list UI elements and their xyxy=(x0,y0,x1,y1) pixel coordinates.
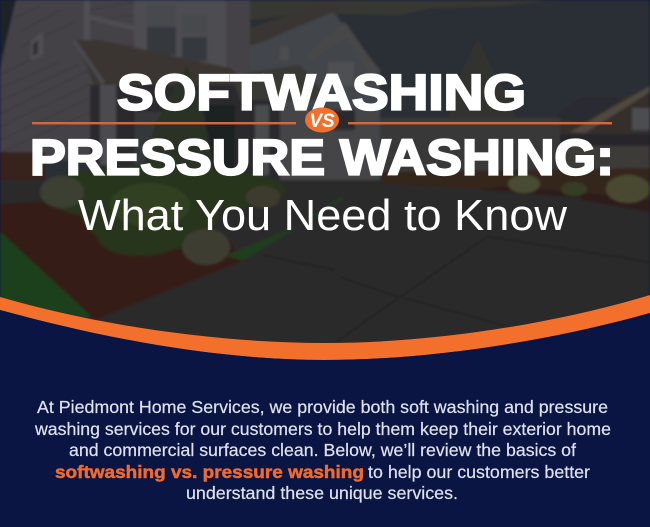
porch roof xyxy=(76,40,270,100)
lawn right xyxy=(225,197,400,263)
lawn left xyxy=(0,232,90,325)
sky xyxy=(0,0,650,200)
main house siding wall xyxy=(0,0,250,160)
orange curved band xyxy=(0,295,650,360)
intro paragraph: understand these unique services. xyxy=(186,483,458,503)
evergreen shrub xyxy=(40,164,285,256)
title line two: PRESSURE WASHING: xyxy=(30,130,614,186)
garage and porch lower xyxy=(90,85,280,185)
mulch bed xyxy=(0,200,240,320)
second house gable xyxy=(230,2,380,185)
centre background houses xyxy=(380,118,560,180)
intro paragraph: and commercial surfaces clean. Below, we’ll review the basics of xyxy=(69,440,576,460)
intro paragraph: At Piedmont Home Services, we provide both soft washing and pressure xyxy=(37,397,608,417)
title divider line left xyxy=(32,122,296,124)
small side window xyxy=(31,32,43,60)
distant tree xyxy=(440,38,540,150)
intro paragraph: washing services for our customers to help them keep their exterior home xyxy=(34,419,611,439)
vs badge: VS xyxy=(309,111,335,132)
subtitle: What You Need to Know xyxy=(78,191,567,240)
right neighbouring house xyxy=(550,86,650,172)
small pine in front of porch xyxy=(140,65,215,175)
intro paragraph xyxy=(34,397,611,503)
ground base xyxy=(0,180,650,350)
driveway xyxy=(95,186,650,330)
navy lower panel xyxy=(0,310,650,527)
intro paragraph: softwashing vs. pressure washing xyxy=(55,462,364,482)
ornamental grass tufts xyxy=(182,229,230,265)
right shrubs xyxy=(508,175,540,193)
title divider line right xyxy=(348,122,612,124)
background photo: suburban house and driveway xyxy=(0,0,650,350)
upper bay window xyxy=(134,0,226,68)
title line one: SOFTWASHING xyxy=(117,64,526,120)
intro paragraph: to help our customers better xyxy=(368,462,590,482)
vs badge xyxy=(305,108,339,132)
